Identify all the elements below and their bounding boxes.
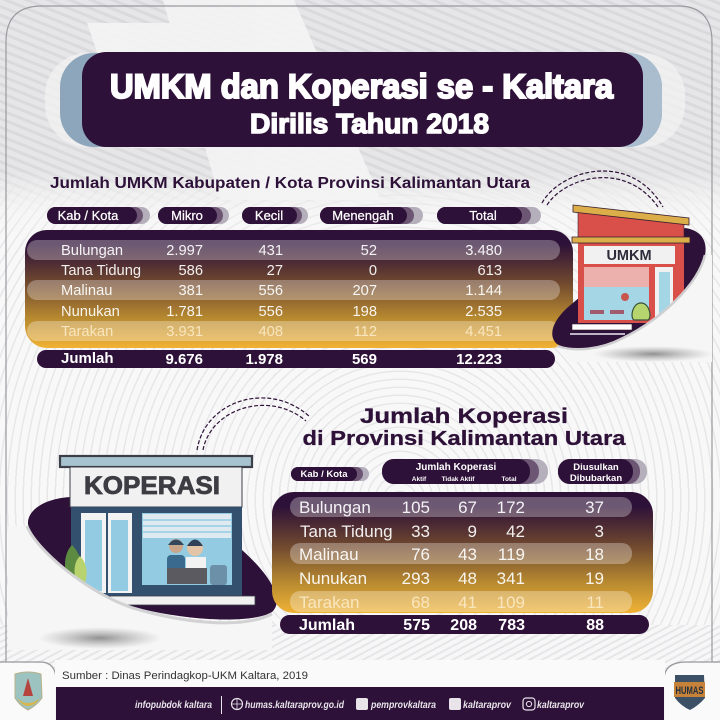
Koperasi table rows: 3 xyxy=(595,522,604,541)
Koperasi total row: 88 xyxy=(586,617,604,634)
Koperasi table rows: Tarakan xyxy=(299,593,359,612)
Koperasi table header xyxy=(291,459,647,484)
Koperasi table rows: 42 xyxy=(506,522,525,541)
Koperasi table header: Diusulkan xyxy=(573,462,619,473)
icon: Humas badge: HUMAS xyxy=(676,685,704,697)
Koperasi table rows: 11 xyxy=(586,593,604,612)
Koperasi table rows: 172 xyxy=(497,498,525,517)
UMKM table rows: 27 xyxy=(267,263,283,279)
UMKM table rows: 52 xyxy=(361,243,377,259)
Koperasi total row: 208 xyxy=(450,617,477,634)
UMKM table header: Mikro xyxy=(171,208,203,223)
UMKM table header: Kab / Kota xyxy=(58,208,119,223)
footer: website: humas.kaltaraprov.go.id xyxy=(245,700,345,711)
UMKM table rows: Bulungan xyxy=(61,243,123,259)
Koperasi table rows: 105 xyxy=(402,498,430,517)
Koperasi table rows: 33 xyxy=(411,522,430,541)
icon: Humas badge xyxy=(674,675,705,710)
Koperasi table rows: 341 xyxy=(497,569,525,588)
Koperasi table rows: Tana Tidung xyxy=(300,522,393,541)
Koperasi table rows: 19 xyxy=(585,569,604,588)
UMKM table rows: Tana Tidung xyxy=(61,263,141,279)
Koperasi table header: Dibubarkan xyxy=(570,473,622,484)
heading: Koperasi table xyxy=(302,404,627,450)
UMKM table rows: 198 xyxy=(352,304,377,320)
Koperasi table rows: 109 xyxy=(497,593,525,612)
UMKM total row: 569 xyxy=(352,351,377,368)
UMKM table header: Total xyxy=(469,208,497,223)
UMKM table rows: 3.931 xyxy=(166,324,203,340)
UMKM shop shadow xyxy=(593,346,713,362)
footer bar xyxy=(56,687,664,720)
dashed arc: UMKM xyxy=(542,171,663,207)
UMKM total row: Jumlah xyxy=(61,350,114,367)
Koperasi table rows: 37 xyxy=(585,498,604,517)
UMKM table rows: 1.781 xyxy=(166,304,203,320)
footer: instagram xyxy=(523,698,585,711)
footer: twitter: kaltaraprov xyxy=(463,700,512,711)
UMKM table rows: 2.997 xyxy=(166,243,203,259)
UMKM table rows: 3.480 xyxy=(465,243,502,259)
UMKM table rows: 1.144 xyxy=(465,283,502,299)
Koperasi table rows: 68 xyxy=(411,593,430,612)
Koperasi table rows: 119 xyxy=(498,545,525,564)
bottom white margins xyxy=(0,660,720,720)
Koperasi table rows: 76 xyxy=(411,545,430,564)
footer: twitter xyxy=(449,698,512,711)
UMKM table rows: 381 xyxy=(178,283,203,299)
Koperasi table rows: Malinau xyxy=(299,545,359,564)
UMKM total row: 9.676 xyxy=(165,351,203,368)
Koperasi table rows: 43 xyxy=(458,545,477,564)
UMKM table rows: 0 xyxy=(369,263,377,279)
Koperasi table header: Total xyxy=(501,476,517,483)
icon: Koperasi shop xyxy=(8,456,277,650)
Koperasi table rows: 41 xyxy=(458,593,477,612)
Koperasi table rows: Bulungan xyxy=(299,498,371,517)
Koperasi table rows: 9 xyxy=(468,522,477,541)
Koperasi shop shadow xyxy=(38,627,162,649)
UMKM table rows: 207 xyxy=(352,283,377,299)
icon: Koperasi shop: KOPERASI xyxy=(84,472,220,500)
Koperasi data table xyxy=(272,492,653,613)
UMKM table rows: Malinau xyxy=(61,283,112,299)
UMKM table header xyxy=(47,207,541,224)
title banner xyxy=(45,52,685,147)
heading: Koperasi table: di Provinsi Kalimantan Utara xyxy=(302,428,627,450)
UMKM table rows: 408 xyxy=(258,324,283,340)
Koperasi table rows xyxy=(299,498,604,612)
Koperasi table header: Jumlah Koperasi xyxy=(416,462,497,473)
title line 2: Dirilis Tahun 2018 xyxy=(250,108,489,139)
footer: facebook: pemprovkaltara xyxy=(370,700,436,711)
UMKM table header: Kecil xyxy=(255,208,283,223)
Koperasi table header: Kab / Kota xyxy=(301,469,348,480)
UMKM table rows: Nunukan xyxy=(61,304,120,320)
UMKM table rows: 112 xyxy=(354,324,377,340)
footer: infopubdok: infopubdok kaltara xyxy=(135,700,212,711)
Koperasi table rows: Nunukan xyxy=(299,569,367,588)
UMKM table rows: 586 xyxy=(178,263,203,279)
icon: UMKM shop: UMKM xyxy=(606,248,652,264)
Koperasi total row: 783 xyxy=(498,617,525,634)
UMKM table rows: 4.451 xyxy=(465,324,502,340)
footer: website xyxy=(232,698,345,711)
Koperasi total row: Jumlah xyxy=(299,617,355,634)
Koperasi table rows: 293 xyxy=(402,569,430,588)
Koperasi table header: Aktif xyxy=(412,476,427,483)
source text: Sumber : Dinas Perindagkop-UKM Kaltara, 2019 xyxy=(62,670,308,682)
footer: facebook xyxy=(356,698,436,711)
heading: Koperasi table: Jumlah Koperasi xyxy=(360,404,568,428)
UMKM table rows: 2.535 xyxy=(465,304,502,320)
Koperasi table header: Tidak Aktif xyxy=(442,476,475,483)
UMKM total row: 1.978 xyxy=(245,351,283,368)
icon: UMKM shop xyxy=(552,205,712,362)
UMKM total row xyxy=(37,350,555,368)
heading: UMKM table: Jumlah UMKM Kabupaten / Kota Provinsi Kalimantan Utara xyxy=(50,175,530,192)
UMKM table rows: 613 xyxy=(477,263,502,279)
icon: Kaltara shield logo xyxy=(15,672,42,710)
title line 1: UMKM dan Koperasi se - Kaltara xyxy=(110,68,614,106)
Koperasi total row: 575 xyxy=(403,617,430,634)
white light bands xyxy=(87,0,381,200)
Koperasi table rows: 18 xyxy=(585,545,604,564)
Koperasi table rows: 48 xyxy=(458,569,477,588)
UMKM table rows: 556 xyxy=(258,283,283,299)
UMKM table header: Menengah xyxy=(332,208,394,223)
dashed arc: Koperasi xyxy=(197,398,310,450)
UMKM total row: 12.223 xyxy=(456,351,502,368)
UMKM data table xyxy=(25,230,573,348)
UMKM table rows xyxy=(61,243,502,340)
Koperasi total row xyxy=(280,615,649,634)
UMKM table rows: Tarakan xyxy=(61,324,113,340)
Koperasi table rows: 67 xyxy=(458,498,477,517)
UMKM table rows: 556 xyxy=(258,304,283,320)
UMKM table rows: 431 xyxy=(258,243,283,259)
footer: instagram: kaltaraprov xyxy=(537,700,585,711)
